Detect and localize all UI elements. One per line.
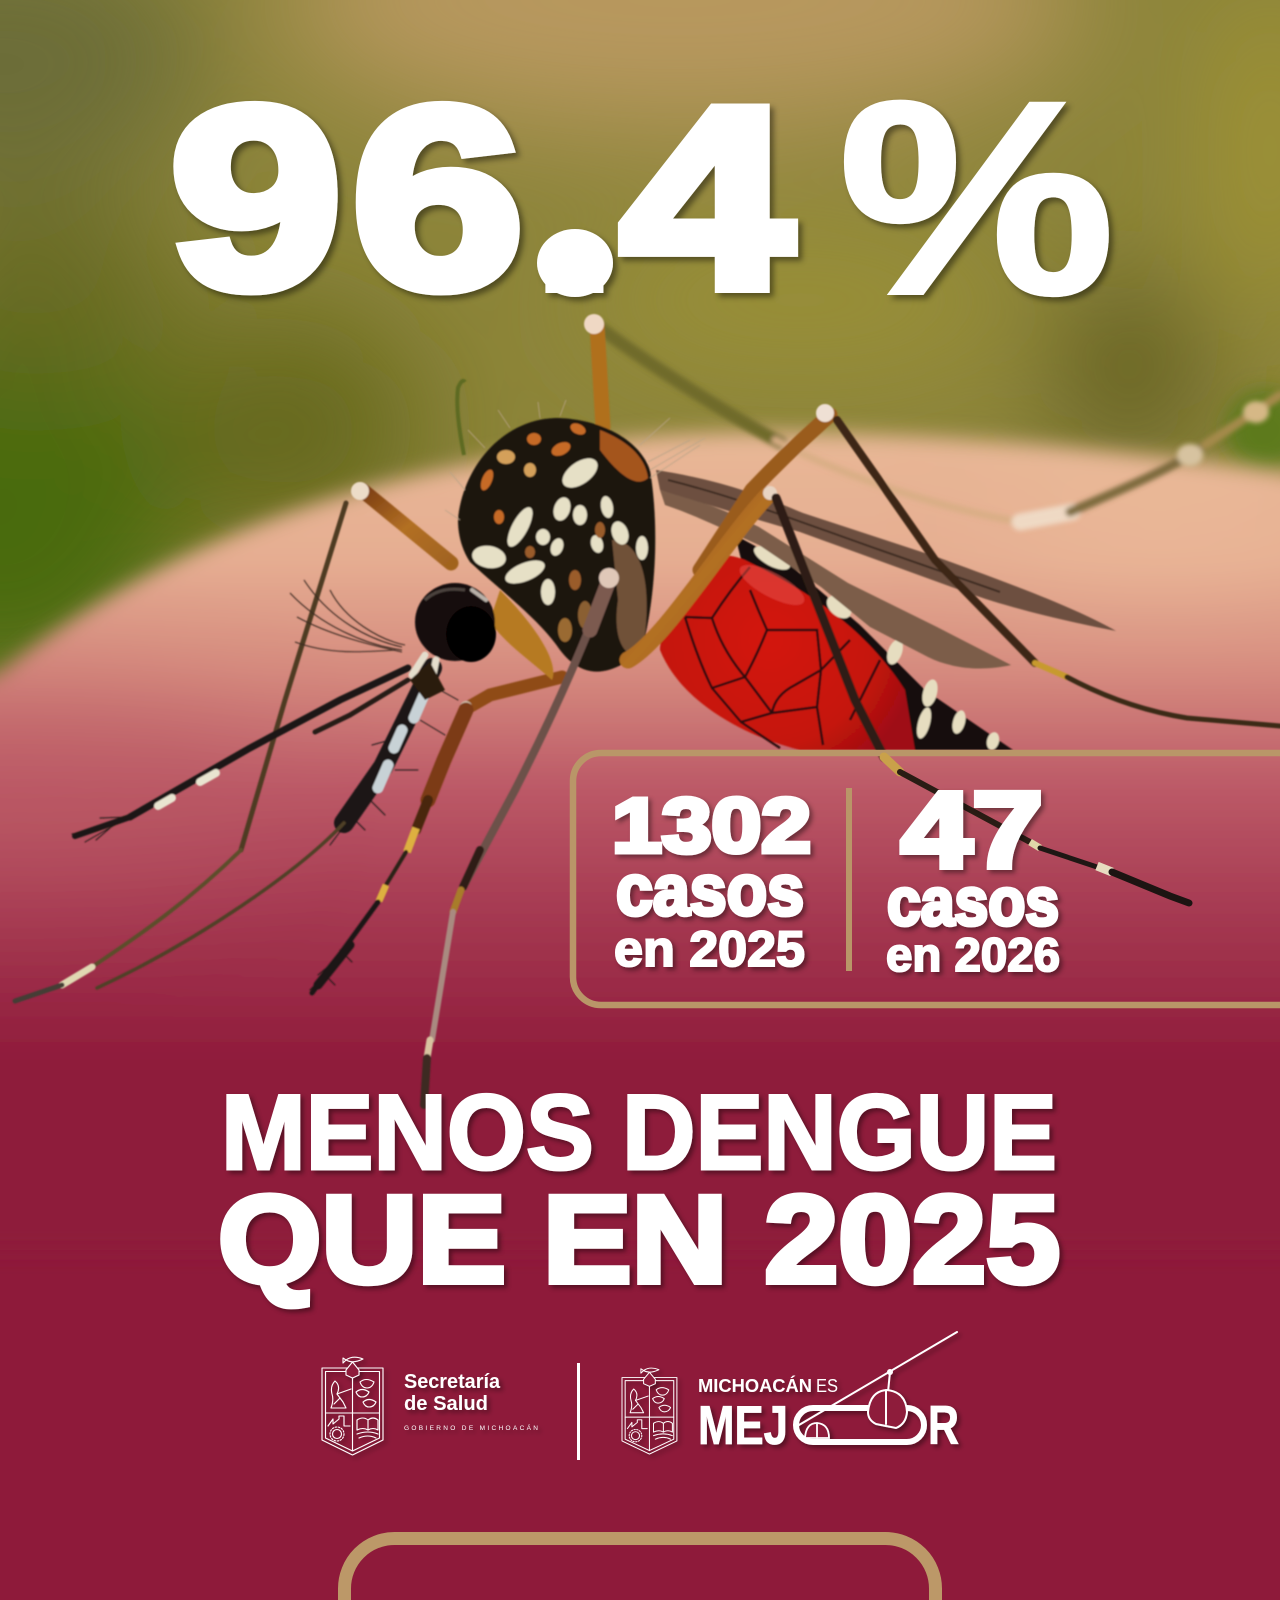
background: blurred skin surface fading into burgundy — [0, 419, 1280, 1017]
headline: QUE EN 2025 — [218, 1171, 1060, 1309]
icon: state coat of arms — [322, 1357, 383, 1455]
logo: Michoacán es Mejor: ES — [816, 1376, 838, 1396]
stat: 2025 cases: casos — [616, 851, 804, 931]
headline — [218, 1072, 1060, 1309]
near knee and orange leg over the abdomen — [628, 486, 884, 757]
headline: MENOS DENGUE — [221, 1072, 1057, 1192]
stats panel: case comparison — [573, 753, 1280, 1005]
wings — [656, 470, 1116, 668]
vertical divider — [846, 788, 852, 971]
far legs, out of focus — [596, 325, 1280, 522]
hind leg lower section crossing the panel — [884, 757, 1189, 903]
logo: Michoacán es Mejor: MEJ — [698, 1394, 788, 1456]
icon: cable car forming the letter O — [796, 1332, 957, 1442]
logo: Michoacán es Mejor — [622, 1332, 959, 1456]
middle orange leg — [310, 677, 562, 993]
front leg in the foreground — [424, 568, 619, 1105]
head with compound eye — [290, 580, 553, 700]
mosquito illustration — [15, 314, 1280, 1105]
thorax bristles — [445, 400, 705, 520]
front left leg with knee — [15, 482, 451, 1001]
stat: 2025 cases: 1302 — [612, 783, 811, 869]
main figure: 96.4 %: 96.4 — [170, 54, 795, 342]
striped middle appendage — [97, 668, 458, 988]
logo: Secretaría de Salud: GOBIERNO DE MICHOACÁN — [404, 1423, 538, 1432]
main figure: 96.4 %: % — [838, 45, 1115, 352]
palps and proboscis — [72, 668, 408, 842]
photo background: blurred olive and green foliage — [0, 0, 1280, 1000]
icon: state coat of arms small — [622, 1368, 677, 1454]
stat: 2026 cases: casos — [887, 864, 1059, 940]
logo separator — [577, 1363, 580, 1460]
logo: Secretaría de Salud: de Salud — [404, 1393, 488, 1415]
stat: 2025 cases: en 2025 — [614, 921, 805, 977]
thorax with pale and orange scales — [445, 400, 705, 672]
abdomen pale scale marks — [751, 542, 1001, 751]
logo: Secretaría de Salud: Secretaría — [404, 1371, 501, 1393]
stat: 2026 cases — [886, 769, 1060, 981]
antenna stub — [457, 381, 465, 455]
stat: 2025 cases — [612, 783, 811, 977]
logo: Michoacán es Mejor: R — [928, 1394, 959, 1456]
main figure: 96.4 % — [170, 45, 1115, 352]
stat: 2026 cases: en 2026 — [886, 928, 1060, 981]
abdomen: blood-filled with dark veining — [660, 535, 1013, 751]
logo: Michoacán es Mejor: MICHOACÁN — [698, 1375, 812, 1396]
hind leg thigh and knee — [700, 404, 1280, 726]
logo: Secretaría de Salud — [322, 1357, 538, 1455]
empty gold-framed panel cut off at bottom — [344, 1538, 936, 1600]
antenna hairs — [290, 580, 405, 652]
stat: 2026 cases: 47 — [901, 769, 1043, 890]
panel border — [573, 753, 1280, 1005]
